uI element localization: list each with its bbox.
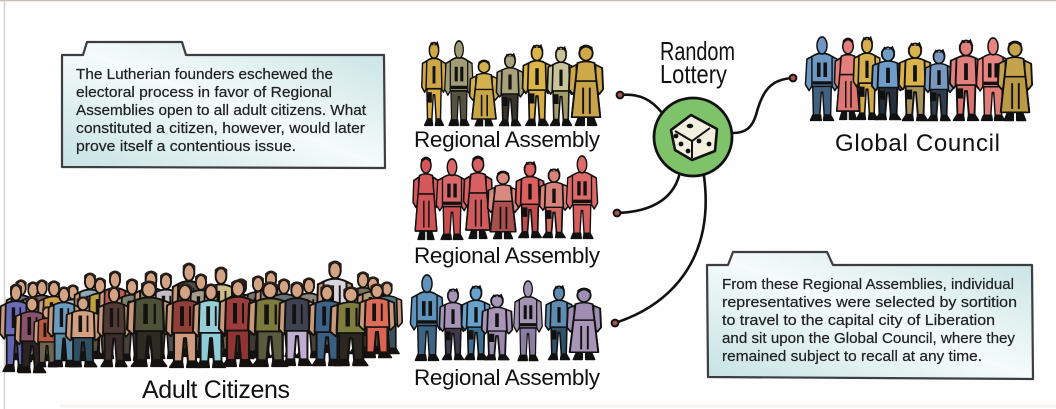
callout text: founders: Assemblies open to all adult citizens. What <box>76 102 367 119</box>
label: random lottery: Random <box>660 36 735 66</box>
label: regional assembly 2: Regional Assembly <box>414 243 601 268</box>
label: random lottery: Lottery <box>660 59 727 89</box>
callout text: sortition: remained subject to recall at any time. <box>722 348 982 365</box>
arrow: blue assembly to lottery <box>612 176 706 326</box>
label: global council: Global Council <box>835 130 1000 157</box>
arrow: lottery to global council <box>733 75 796 133</box>
label: regional assembly 3: Regional Assembly <box>414 365 601 390</box>
panel: sortition callout <box>707 252 1033 379</box>
callout text: founders: constituted a citizen, however, would later <box>76 120 365 137</box>
figures: red regional assembly <box>413 156 598 239</box>
figures: yellow regional assembly <box>422 41 603 126</box>
callout text: sortition: and sit upon the Global Council, where they <box>722 330 1015 347</box>
crowd: adult citizens <box>0 260 402 372</box>
callout text: sortition: to travel to the capital city of Liberation <box>722 312 995 329</box>
callout text: sortition: From these Regional Assemblies, individual <box>722 276 1014 293</box>
figures: blue regional assembly <box>410 275 601 360</box>
crowd back row <box>6 260 402 361</box>
figures: global council <box>805 36 1032 121</box>
label: adult citizens: Adult Citizens <box>142 376 290 404</box>
callout text: founders: electoral process in favor of Regional <box>76 84 332 101</box>
callout text: sortition: representatives were selected by sortition <box>722 294 1017 311</box>
arrow: yellow assembly to lottery <box>617 92 663 114</box>
arrow: red assembly to lottery <box>614 176 679 216</box>
callout text: founders: prove itself a contentious issue. <box>76 138 296 155</box>
label: regional assembly 1: Regional Assembly <box>414 127 601 152</box>
crowd front row <box>0 279 395 372</box>
callout text: founders: The Lutherian founders eschewed the <box>76 66 333 83</box>
icon: lottery die in green circle <box>654 98 732 176</box>
panel: Lutherian founders callout <box>62 42 385 168</box>
